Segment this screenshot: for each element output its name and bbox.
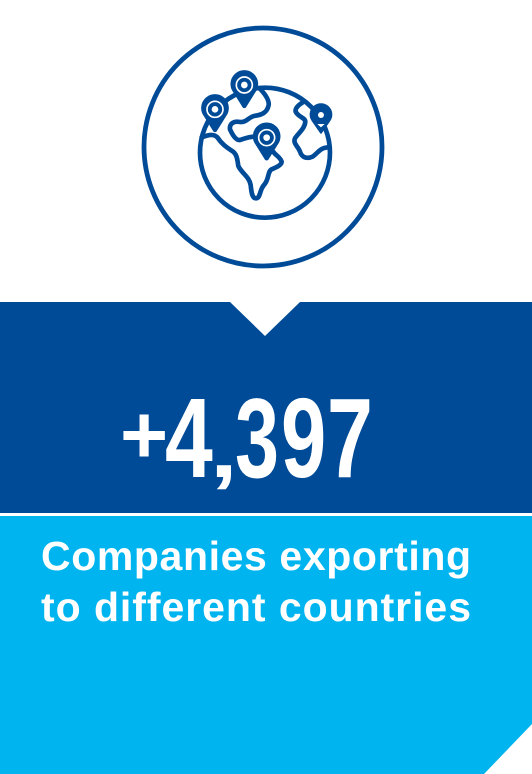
stat number: 4 xyxy=(165,376,213,502)
caption line 1: Companies exporting xyxy=(41,533,471,579)
map pin 2 xyxy=(233,72,256,106)
map pin 3 xyxy=(255,125,278,158)
globe with continents xyxy=(200,88,330,218)
stat number xyxy=(120,374,373,502)
stat number: , xyxy=(210,407,238,495)
stat number: 7 xyxy=(327,374,373,501)
icon ring xyxy=(144,28,382,266)
map pin 4 xyxy=(311,104,331,133)
panel: light blue caption panel with cut corner xyxy=(0,516,532,774)
stat number: 9 xyxy=(281,375,326,501)
caption line 2: to different countries xyxy=(41,584,471,630)
stat number: + xyxy=(120,389,168,481)
stat number: 3 xyxy=(235,375,279,501)
caption text xyxy=(41,533,471,630)
panel: dark blue stat panel with notch xyxy=(0,302,532,513)
icon: globe with map pins xyxy=(144,28,382,266)
map pin 1 xyxy=(203,96,227,130)
